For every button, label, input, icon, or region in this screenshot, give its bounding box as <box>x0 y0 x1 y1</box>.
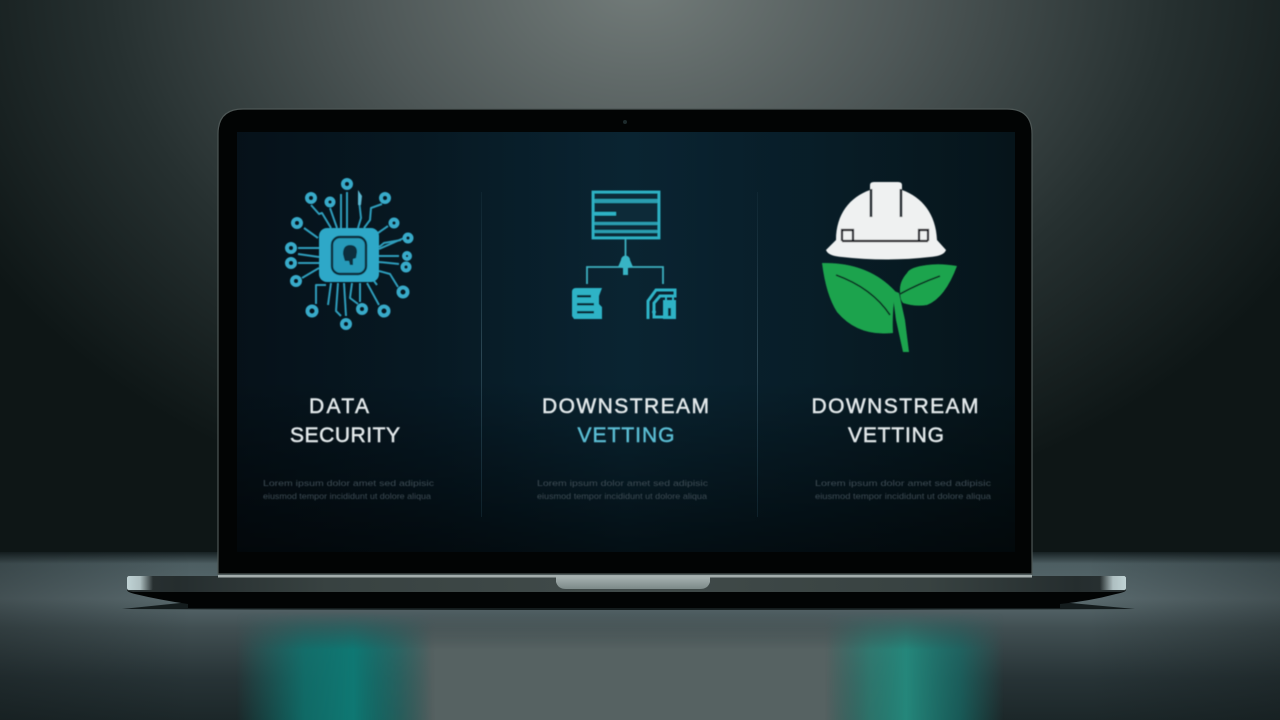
laptop <box>122 109 1135 610</box>
circuit nodes <box>287 180 412 328</box>
floor surface with teal reflections <box>0 552 1280 720</box>
icon: circuit chip <box>287 180 412 328</box>
stem <box>892 290 909 352</box>
large leaf <box>822 263 895 334</box>
connector lock <box>618 256 633 275</box>
small leaf <box>900 264 957 306</box>
heading: data security <box>290 395 400 447</box>
column divider right <box>757 192 758 517</box>
laptop base <box>127 575 1126 608</box>
heading: downstream vetting right: VETTING <box>848 424 944 447</box>
connector tree <box>587 238 663 284</box>
background wall <box>0 0 1280 560</box>
laptop hinge notch <box>556 576 710 589</box>
chip body <box>319 228 379 282</box>
body text column two: Lorem ipsum dolor amet sed adipisic <box>537 478 709 488</box>
icon: hard hat with leaves <box>822 182 957 352</box>
trace arrow tip <box>358 190 362 205</box>
body text column two: eiusmod tempor incididunt ut dolore aliqua <box>537 491 707 501</box>
top document window <box>593 192 659 238</box>
heading: downstream vetting <box>542 395 709 447</box>
icon: document hierarchy <box>572 192 676 319</box>
body text column one <box>263 478 435 501</box>
chip padlock glyph <box>343 245 357 265</box>
heading: downstream vetting right <box>812 395 978 447</box>
body text column three: Lorem ipsum dolor amet sed adipisic <box>815 478 992 488</box>
webcam <box>623 120 627 124</box>
laptop lid <box>218 109 1032 574</box>
hard hat <box>826 182 946 260</box>
body text column two <box>537 478 709 501</box>
body text column three <box>815 478 992 501</box>
body text column three: eiusmod tempor incididunt ut dolore aliqua <box>815 491 991 501</box>
heading: data security: DATA <box>309 395 369 418</box>
laptop shadow <box>122 602 1135 610</box>
left document <box>572 288 602 319</box>
right document with lock <box>648 290 676 319</box>
column divider left <box>481 192 482 517</box>
body text column one: Lorem ipsum dolor amet sed adipisic <box>263 478 435 488</box>
screen <box>237 132 1015 552</box>
heading: downstream vetting right: DOWNSTREAM <box>812 395 978 418</box>
heading: downstream vetting: DOWNSTREAM <box>542 395 709 418</box>
circuit traces <box>298 192 404 316</box>
chip inner frame <box>332 237 366 274</box>
leaf veins <box>836 275 940 315</box>
body text column one: eiusmod tempor incididunt ut dolore aliqua <box>263 491 431 501</box>
heading: downstream vetting: VETTING <box>578 424 674 447</box>
heading: data security: SECURITY <box>290 424 400 447</box>
